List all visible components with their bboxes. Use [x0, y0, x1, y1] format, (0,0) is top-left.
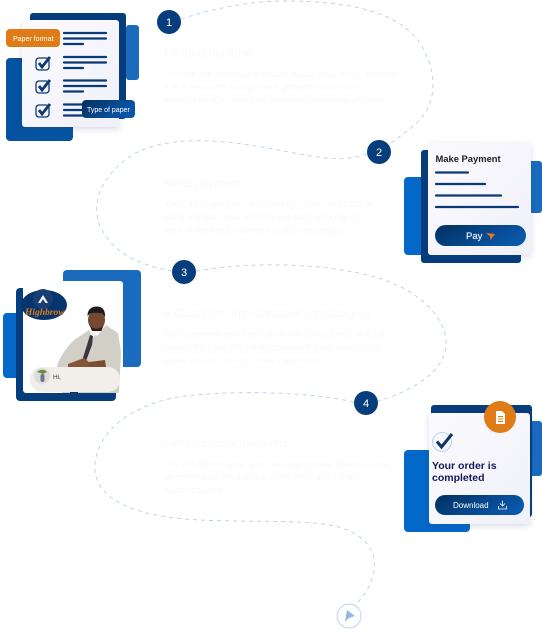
end marker: paper plane: [337, 604, 361, 628]
step 4 marker: [354, 391, 378, 415]
step 1 description: Provide the necessary details about your work, whether: [164, 69, 399, 80]
dashed route path: [95, 1, 446, 606]
step 3 description: Our customer representative will contact you to track: [164, 329, 387, 340]
completed card: [429, 413, 530, 524]
step 3 description: your order, get any other additional information and: [164, 342, 380, 353]
payment lines: [436, 172, 518, 207]
step 4 description: We will deliver your work as appropriate based on the: [164, 459, 390, 470]
step 4 description: specifications.: [164, 485, 224, 496]
label: paper format: Paper format: [13, 36, 54, 43]
step 2 heading: Make payment: [164, 177, 241, 190]
chat bubble: Hi,: [53, 374, 61, 381]
step 1 marker: [157, 10, 181, 34]
check mark badge: [432, 432, 452, 452]
orange document badge: [484, 401, 516, 433]
form lines: [64, 33, 106, 116]
step 2 marker: [367, 140, 391, 164]
step 3 marker: 3: [181, 267, 187, 279]
form card: [22, 20, 119, 127]
step 4 marker: 4: [363, 398, 369, 410]
label: type of paper: Type of paper: [87, 107, 130, 114]
representative photo: [57, 306, 121, 393]
step 3 marker: [172, 260, 196, 284]
checkboxes: [36, 57, 50, 117]
step 4 heading: Get your work delivered: [164, 437, 286, 450]
step 2 marker: 2: [376, 147, 382, 159]
photo card: [23, 281, 123, 393]
step 2 description: bank transfer. Our experts will start working on: [164, 212, 360, 223]
download button: Download: [453, 501, 489, 510]
step 4 description: deadline you filled in the order form and other: [164, 472, 357, 483]
completed message: completed: [432, 472, 485, 484]
step 1 description: statement of purpose for graduate school application.: [164, 95, 389, 106]
step 4 illustration: order completed: [404, 401, 542, 532]
step 1 illustration: order form: [6, 13, 139, 141]
step 1 marker: 1: [166, 17, 172, 29]
step 1 description: it is a research assignment, project proposal or: [164, 82, 363, 93]
step 2 description: You can make payments using your credit card or: [164, 199, 374, 210]
step 3 heading: A Customer representative contacts you: [164, 307, 370, 320]
step 3 description: guide you on how to make payments.: [164, 355, 322, 366]
payment panel: [428, 143, 531, 255]
step 3 illustration: customer representative: [3, 270, 141, 401]
pay button: Pay: [466, 231, 483, 242]
brand logo: Highbrow: [24, 308, 65, 318]
step 1 heading: Fill an order form: [164, 47, 252, 60]
completed message: Your order is: [432, 460, 497, 472]
step 2 illustration: payment card: [404, 143, 542, 263]
step 2 description: your order once payment is acknowledged.: [164, 225, 346, 236]
payment title: Make Payment: [436, 153, 501, 164]
